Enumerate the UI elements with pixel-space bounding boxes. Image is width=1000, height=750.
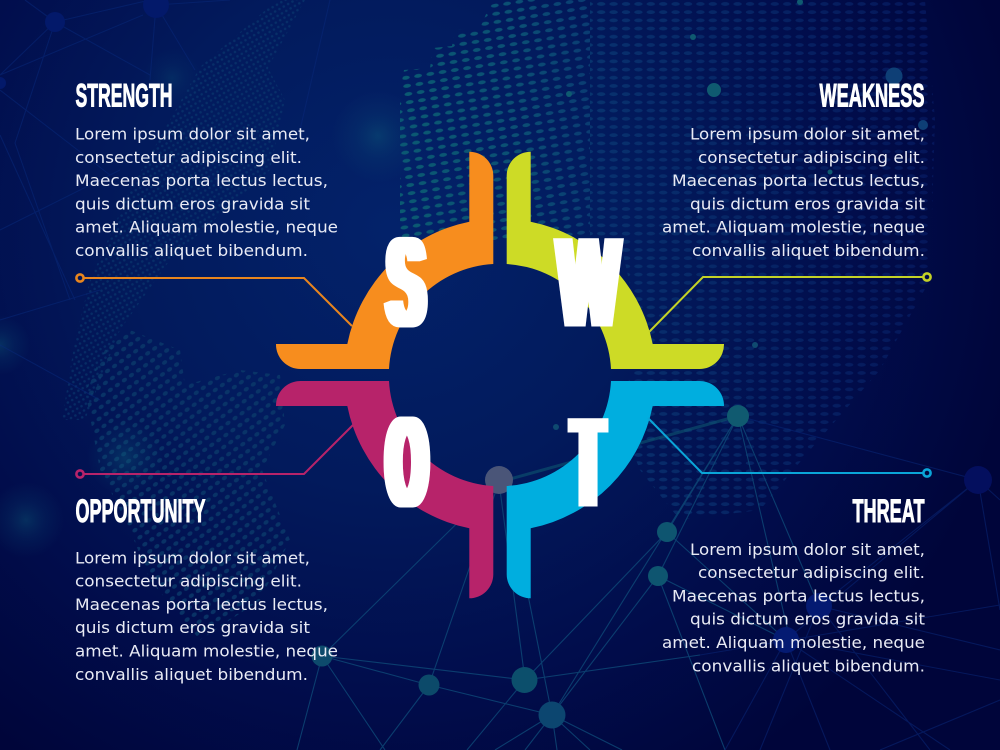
text block: weakness: quis dictum eros gravida sit — [690, 195, 925, 213]
connector: strength — [76, 274, 352, 326]
segment: weakness (lime) — [507, 152, 724, 369]
text block: strength — [75, 126, 338, 260]
swot diagram: O — [388, 392, 426, 534]
panel: opportunity — [75, 493, 338, 684]
swot diagram: S — [388, 212, 424, 354]
text block: threat: consectetur adipiscing elit. — [698, 564, 925, 582]
dotted world map: lower left — [85, 330, 290, 640]
text block: threat: Lorem ipsum dolor sit amet, — [690, 541, 925, 559]
segment: threat (blue) — [507, 381, 724, 598]
heading: opportunity: OPPORTUNITY — [76, 493, 206, 529]
text block: weakness: convallis aliquet bibendum. — [692, 242, 925, 260]
text block: threat: Maecenas porta lectus lectus, — [672, 587, 925, 605]
text block: opportunity — [75, 549, 338, 684]
dotted world map: upper right, left part — [400, 0, 590, 240]
text block: threat — [662, 541, 925, 675]
panel: weakness — [662, 78, 925, 260]
heading: threat: THREAT — [852, 493, 925, 529]
text block: threat: quis dictum eros gravida sit — [690, 611, 925, 629]
text block: strength: Lorem ipsum dolor sit amet, — [75, 126, 310, 144]
connector: threat — [648, 418, 931, 477]
heading: strength: STRENGTH — [76, 78, 172, 114]
letter W: W — [558, 212, 619, 354]
text block: weakness: Maecenas porta lectus lectus, — [672, 172, 925, 190]
segment: strength (orange) — [276, 152, 493, 369]
segment: opportunity (magenta) — [276, 381, 493, 598]
connector: opportunity — [76, 425, 353, 478]
text block: strength: Maecenas porta lectus lectus, — [75, 172, 328, 190]
text block: strength: quis dictum eros gravida sit — [75, 195, 310, 213]
text block: opportunity: Maecenas porta lectus lectus, — [75, 596, 328, 614]
text block: opportunity: consectetur adipiscing elit. — [75, 573, 302, 591]
text block: opportunity: quis dictum eros gravida sit — [75, 619, 310, 637]
text block: opportunity: convallis aliquet bibendum. — [75, 666, 308, 684]
text block: weakness: consectetur adipiscing elit. — [698, 149, 925, 167]
text block: strength: consectetur adipiscing elit. — [75, 149, 302, 167]
connector: weakness — [649, 273, 931, 332]
text block: threat: amet. Aliquam molestie, neque — [662, 634, 925, 652]
panel: strength — [75, 78, 338, 260]
swot diagram: T — [573, 392, 603, 534]
text block: weakness — [662, 126, 925, 260]
text block: strength: amet. Aliquam molestie, neque — [75, 219, 338, 237]
text block: weakness: Lorem ipsum dolor sit amet, — [690, 126, 925, 144]
text block: weakness: amet. Aliquam molestie, neque — [662, 219, 925, 237]
text block: strength: convallis aliquet bibendum. — [75, 242, 308, 260]
glow spots — [0, 48, 424, 558]
text block: opportunity: amet. Aliquam molestie, neque — [75, 642, 338, 660]
panel: threat — [662, 493, 925, 675]
text block: threat: convallis aliquet bibendum. — [692, 657, 925, 675]
network lines — [297, 416, 819, 750]
text block: opportunity: Lorem ipsum dolor sit amet, — [75, 549, 310, 567]
dotted globe band: upper left — [62, 0, 305, 420]
swot diagram — [276, 152, 724, 598]
dotted world map: upper right, right part — [590, 0, 935, 520]
